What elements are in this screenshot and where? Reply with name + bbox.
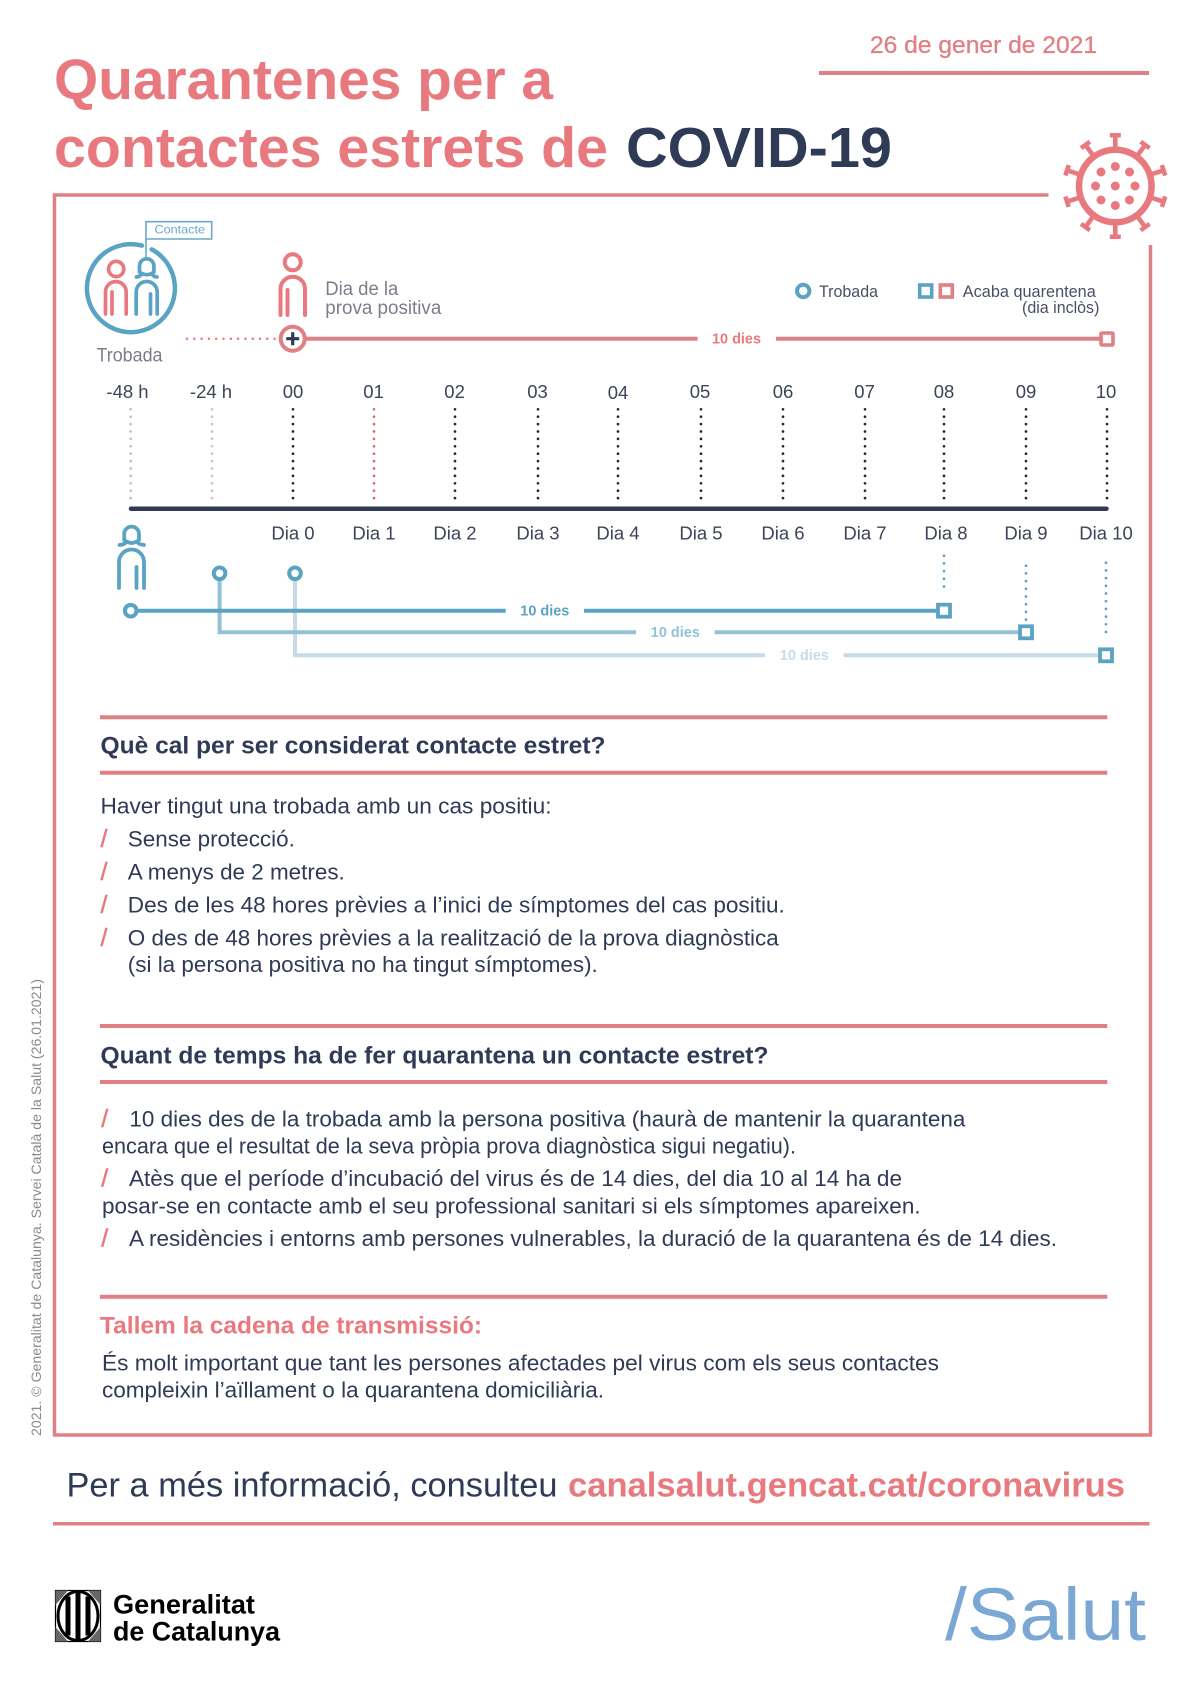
date: 26 de gener de 2021 [870,32,1097,59]
title: Quarantenes per a [54,48,554,112]
more information line: canalsalut.gencat.cat/coronavirus [568,1467,1125,1505]
Salut logo: /Salut [945,1573,1146,1656]
plus marker [281,327,305,351]
icon: contact person [119,527,144,588]
first contact line [125,604,950,620]
hour and day number labels: 03 [527,381,548,402]
hour and day number labels [106,381,1116,403]
text: criteria list: Haver tingut una trobada amb un cas positiu: [100,793,552,818]
text: criteria list: / [100,858,108,886]
text: duration list: / [101,1164,108,1192]
text: criteria list: / [100,825,108,853]
label: positive test day: prova positiva [325,298,442,319]
text: criteria list [100,793,785,977]
legend [797,283,1099,317]
credit: 2021. © Generalitat de Catalunya. Servei Català de la Salut (26.01.2021) [29,979,44,1436]
section: quarantine duration [100,1026,1107,1252]
dotted day markers [131,409,1107,499]
day labels: Dia 3 [516,522,560,544]
text: break the chain body [102,1350,939,1402]
flag: Contacte: Contacte [154,222,205,236]
icon: meeting circle with two people [87,244,175,332]
dotted link to test day [187,337,276,340]
text: criteria list: / [100,924,108,952]
red quarantine line: 10 dies [712,331,761,347]
first contact line: 10 dies [520,604,569,620]
icon: virus [1063,133,1167,239]
hour and day number labels: 00 [283,381,303,402]
third contact line: 10 dies [780,648,829,664]
heading: break the chain: Tallem la cadena de transmissió: [100,1312,482,1340]
icon: positive person [280,254,305,315]
icon: Generalitat logo [56,1590,100,1642]
day labels: Dia 10 [1079,522,1133,544]
day labels: Dia 8 [924,522,968,544]
text: duration list: encara que el resultat de la seva pròpia prova diagnòstica sigui negatiu). [102,1133,796,1158]
legend: (dia inclòs) [1022,299,1099,317]
hour and day number labels: 07 [854,381,875,402]
second contact line [214,568,1032,641]
text: criteria list: / [100,891,108,919]
hour and day number labels: 01 [363,381,384,402]
hour and day number labels: 10 [1096,381,1116,402]
text: duration list: / [101,1105,108,1133]
heading: duration: Quant de temps ha de fer quarantena un contacte estret? [100,1042,768,1069]
text: criteria list: (si la persona positiva no ha tingut símptomes). [128,952,598,977]
text: break the chain body: És molt important que tant les persones afectades pel virus com els seus contactes [102,1350,939,1376]
day labels: Dia 6 [761,522,805,544]
main frame [54,195,1150,1435]
date rule [819,71,1149,75]
day labels: Dia 5 [679,522,723,544]
day labels: Dia 4 [596,522,640,544]
more information line [66,1467,1125,1505]
day labels: Dia 2 [433,522,477,544]
text: break the chain body: compleixin l’aïllament o la quarantena domiciliària. [102,1378,604,1402]
footer rule [53,1522,1150,1525]
day labels: Dia 7 [843,522,887,544]
day labels: Dia 1 [352,522,396,544]
second contact line: 10 dies [651,625,700,641]
hour and day number labels: 06 [773,381,793,402]
text: duration list: 10 dies des de la trobada amb la persona positiva (haurà de mantenir la quarantena [129,1107,966,1132]
text: criteria list: Sense protecció. [128,827,295,852]
text: criteria list: O des de 48 hores prèvies a la realització de la prova diagnòstica [128,926,780,951]
third contact line [289,568,1112,664]
text: criteria list: Des de les 48 hores prèvies a l’inici de símptomes del cas positiu. [128,893,785,918]
hour and day number labels: 05 [690,381,710,402]
section: break the chain [100,1297,1107,1402]
text: duration list [101,1105,1057,1252]
blue end-day dotted markers [944,556,1106,639]
text: duration list: posar-se en contacte amb el seu professional sanitari si els símptomes apareixen. [102,1194,921,1218]
text: duration list: A residències i entorns amb persones vulnerables, la duració de la quarantena és de 14 dies. [129,1226,1057,1251]
hour and day number labels: 04 [608,382,628,403]
label: Trobada: Trobada [96,344,163,366]
day labels [271,522,1133,544]
more information line: Per a més informació, consulteu [66,1467,558,1505]
heading: close contact: Què cal per ser considerat contacte estret? [100,732,606,760]
hour and day number labels: -48 h [106,381,149,402]
label: positive test day [325,279,442,319]
label: positive test day: Dia de la [325,279,399,300]
hour and day number labels: 08 [934,381,954,402]
day labels: Dia 9 [1004,522,1048,544]
red quarantine line [305,331,1113,347]
timeline axis [131,506,1106,511]
flag: Contacte [146,222,212,257]
text: duration list: Atès que el període d’incubació del virus és de 14 dies, del dia 10 al 14 ha de [129,1166,902,1191]
title: COVID-19 [626,116,892,180]
logo text [113,1589,280,1646]
title: contactes estrets de [54,116,608,180]
hour and day number labels: -24 h [190,381,232,402]
section: close contact definition [100,717,1107,977]
text: criteria list: A menys de 2 metres. [128,859,345,884]
text: duration list: / [101,1224,108,1252]
hour and day number labels: 02 [444,381,465,402]
legend: Trobada [819,283,879,301]
logo text: de Catalunya [113,1616,280,1646]
logo text: Generalitat [113,1589,255,1619]
legend: Acaba quarentena [963,283,1097,301]
hour and day number labels: 09 [1016,381,1036,402]
day labels: Dia 0 [271,522,315,544]
title [54,48,892,180]
